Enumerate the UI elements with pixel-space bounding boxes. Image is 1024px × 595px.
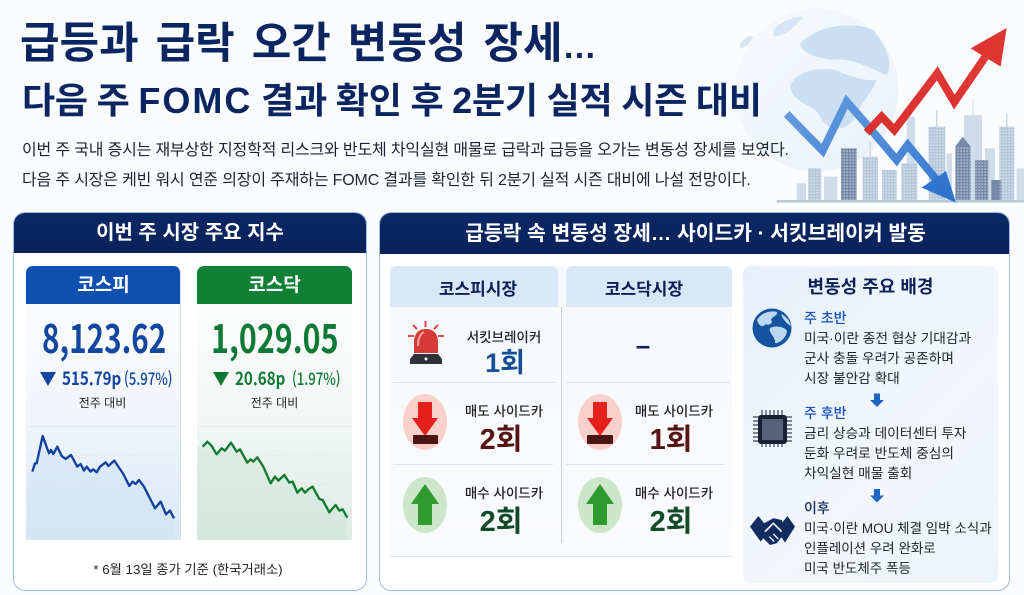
KOSDAQ value: 1,029.05 bbox=[211, 309, 339, 365]
title bbox=[20, 20, 762, 121]
KOSPI buy sidecar: 2회 bbox=[480, 506, 522, 538]
card: KOSDAQ bbox=[197, 266, 352, 540]
KOSDAQ market header: 코스닥시장 bbox=[605, 280, 683, 299]
KOSDAQ buy sidecar: 2회 bbox=[650, 506, 692, 538]
panel: weekly market index bbox=[13, 212, 367, 591]
after text bbox=[804, 500, 992, 576]
KOSPI market header bbox=[390, 266, 558, 307]
KOSDAQ label bbox=[197, 266, 352, 304]
title: 다음 주 FOMC 결과 확인 후 2분기 실적 시즌 대비 bbox=[22, 80, 762, 121]
circuit breaker count: 1회 bbox=[485, 348, 525, 378]
late week text: 차익실현 매물 출회 bbox=[804, 466, 912, 481]
early week text: 군사 충돌 우려가 공존하며 bbox=[804, 351, 954, 366]
KOSDAQ sell sidecar bbox=[635, 404, 713, 456]
KOSDAQ sell sidecar: 1회 bbox=[650, 424, 692, 456]
hero illustration: globe, skyline and arrows bbox=[737, 10, 1024, 203]
KOSPI sell sidecar: 매도 사이드카 bbox=[465, 404, 543, 419]
panel: volatility bbox=[379, 212, 1010, 591]
KOSDAQ sell sidecar: 매도 사이드카 bbox=[635, 404, 713, 419]
late week text: 주 후반 bbox=[804, 405, 847, 421]
KOSDAQ buy sidecar: 매수 사이드카 bbox=[635, 486, 713, 501]
panel heading: 이번 주 시장 주요 지수 bbox=[96, 222, 284, 244]
early week text: 시장 불안감 확대 bbox=[804, 371, 900, 386]
KOSPI buy sidecar bbox=[465, 486, 543, 538]
KOSPI change: 515.79p bbox=[62, 365, 121, 391]
KOSDAQ buy sidecar bbox=[635, 486, 713, 538]
early week text bbox=[804, 310, 971, 386]
footnote: * 6월 13일 종가 기준 (한국거래소) bbox=[93, 562, 283, 577]
after text: 인플레이션 우려 완화로 bbox=[804, 541, 936, 556]
late week text: 둔화 우려로 반도체 중심의 bbox=[804, 446, 954, 461]
early week text: 미국·이란 종전 협상 기대감과 bbox=[804, 331, 971, 346]
table background bbox=[390, 266, 732, 557]
KOSPI caption: 전주 대비 bbox=[79, 396, 126, 410]
late week text: 금리 상승과 데이터센터 투자 bbox=[804, 426, 967, 441]
KOSPI change bbox=[40, 365, 173, 391]
after text: 이후 bbox=[804, 500, 830, 516]
KOSDAQ change: (1.97%) bbox=[292, 365, 341, 390]
intro text bbox=[22, 142, 789, 189]
after text: 미국·이란 MOU 체결 임박 소식과 bbox=[804, 521, 992, 536]
KOSDAQ change: 20.68p bbox=[235, 365, 285, 391]
title: 급등과 급락 오간 변동성 장세… bbox=[20, 20, 597, 68]
KOSDAQ dash: – bbox=[636, 330, 650, 360]
KOSPI buy sidecar: 매수 사이드카 bbox=[465, 486, 543, 501]
KOSDAQ caption: 전주 대비 bbox=[251, 396, 298, 410]
KOSPI market header: 코스피시장 bbox=[439, 280, 517, 299]
intro text: 다음 주 시장은 케빈 워시 연준 의장이 주재하는 FOMC 결과를 확인한 뒤 2분기 실적 시즌 대비에 나설 전망이다. bbox=[22, 172, 751, 189]
panel heading bbox=[13, 212, 367, 253]
KOSDAQ change bbox=[213, 365, 341, 391]
panel heading bbox=[379, 212, 1010, 254]
background heading: 변동성 주요 배경 bbox=[808, 277, 933, 297]
KOSPI label: 코스피 bbox=[77, 275, 130, 296]
KOSPI change: (5.97%) bbox=[124, 365, 173, 390]
KOSPI sell sidecar: 2회 bbox=[480, 424, 522, 456]
KOSDAQ label: 코스닥 bbox=[248, 275, 301, 296]
panel heading: 급등락 속 변동성 장세… 사이드카 · 서킷브레이커 발동 bbox=[465, 223, 926, 245]
card: KOSPI bbox=[26, 266, 181, 540]
KOSPI sell sidecar bbox=[465, 404, 543, 456]
intro text: 이번 주 국내 증시는 재부상한 지정학적 리스크와 반도체 차익실현 매물로 급락과 급등을 오가는 변동성 장세를 보였다. bbox=[22, 142, 789, 159]
late week text bbox=[804, 405, 967, 481]
early week text: 주 초반 bbox=[804, 310, 847, 326]
KOSPI value: 8,123.62 bbox=[42, 309, 166, 365]
after text: 미국 반도체주 폭등 bbox=[804, 561, 911, 576]
KOSDAQ market header bbox=[566, 266, 732, 307]
panel: volatility background bbox=[743, 266, 998, 583]
line charts bbox=[26, 426, 350, 524]
circuit breaker label: 서킷브레이커 bbox=[467, 330, 541, 345]
KOSPI label bbox=[26, 266, 181, 304]
